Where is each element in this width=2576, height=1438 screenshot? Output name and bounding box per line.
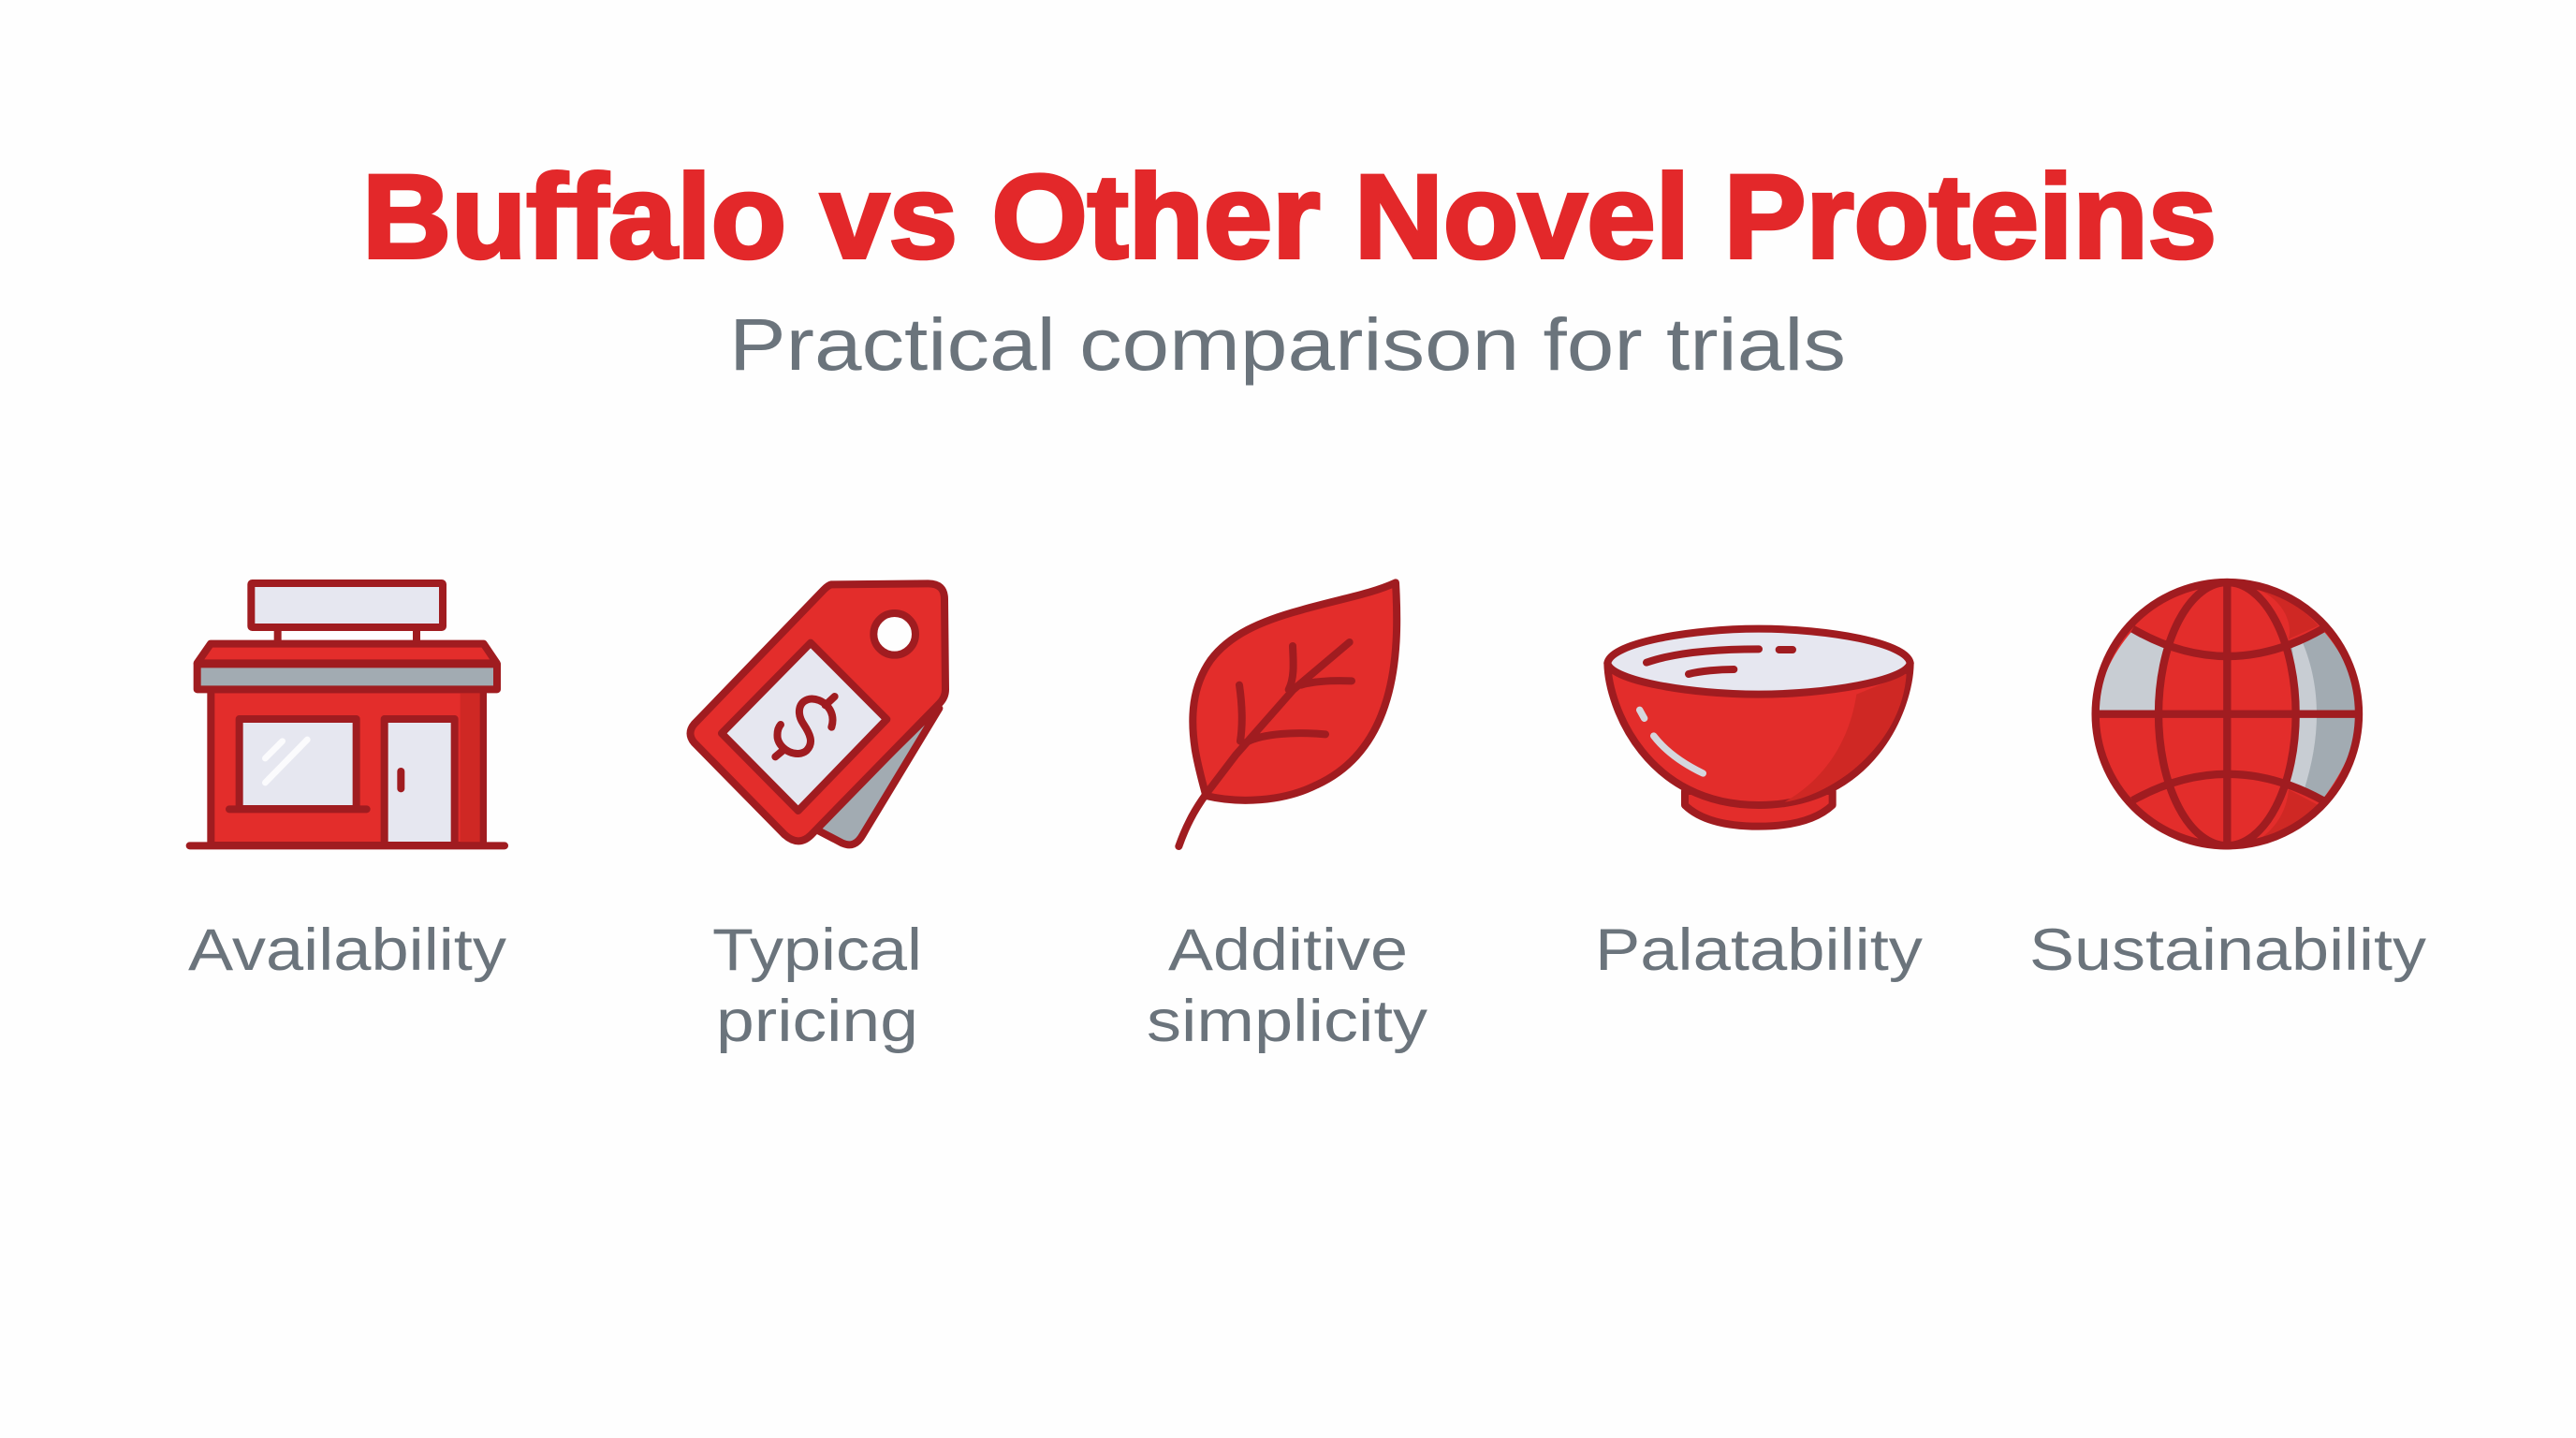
- title: Buffalo vs Other Novel Proteins: [362, 150, 2217, 283]
- panel: sustainability: [2029, 582, 2427, 983]
- label: typical pricing: pricing: [716, 989, 918, 1054]
- icon: leaf: [1178, 582, 1397, 846]
- icon: price tag: [690, 583, 945, 844]
- icon: globe: [2096, 582, 2359, 845]
- label: typical pricing: Typical: [712, 917, 922, 983]
- panel: typical pricing: [690, 583, 945, 1054]
- panel: availability: [188, 583, 507, 983]
- icon: storefront: [190, 583, 505, 845]
- label: additive simplicity: Additive: [1168, 917, 1408, 983]
- subtitle: Practical comparison for trials: [729, 302, 1846, 386]
- label: typical pricing: [712, 917, 922, 1054]
- label: additive simplicity: [1147, 917, 1428, 1054]
- label: palatability: Palatability: [1595, 917, 1924, 983]
- label: sustainability: Sustainability: [2029, 917, 2427, 983]
- label: availability: Availability: [188, 917, 507, 983]
- label: additive simplicity: simplicity: [1147, 989, 1428, 1054]
- panel: palatability: [1595, 629, 1924, 983]
- icon: bowl: [1607, 629, 1910, 827]
- panel: additive simplicity: [1147, 582, 1428, 1054]
